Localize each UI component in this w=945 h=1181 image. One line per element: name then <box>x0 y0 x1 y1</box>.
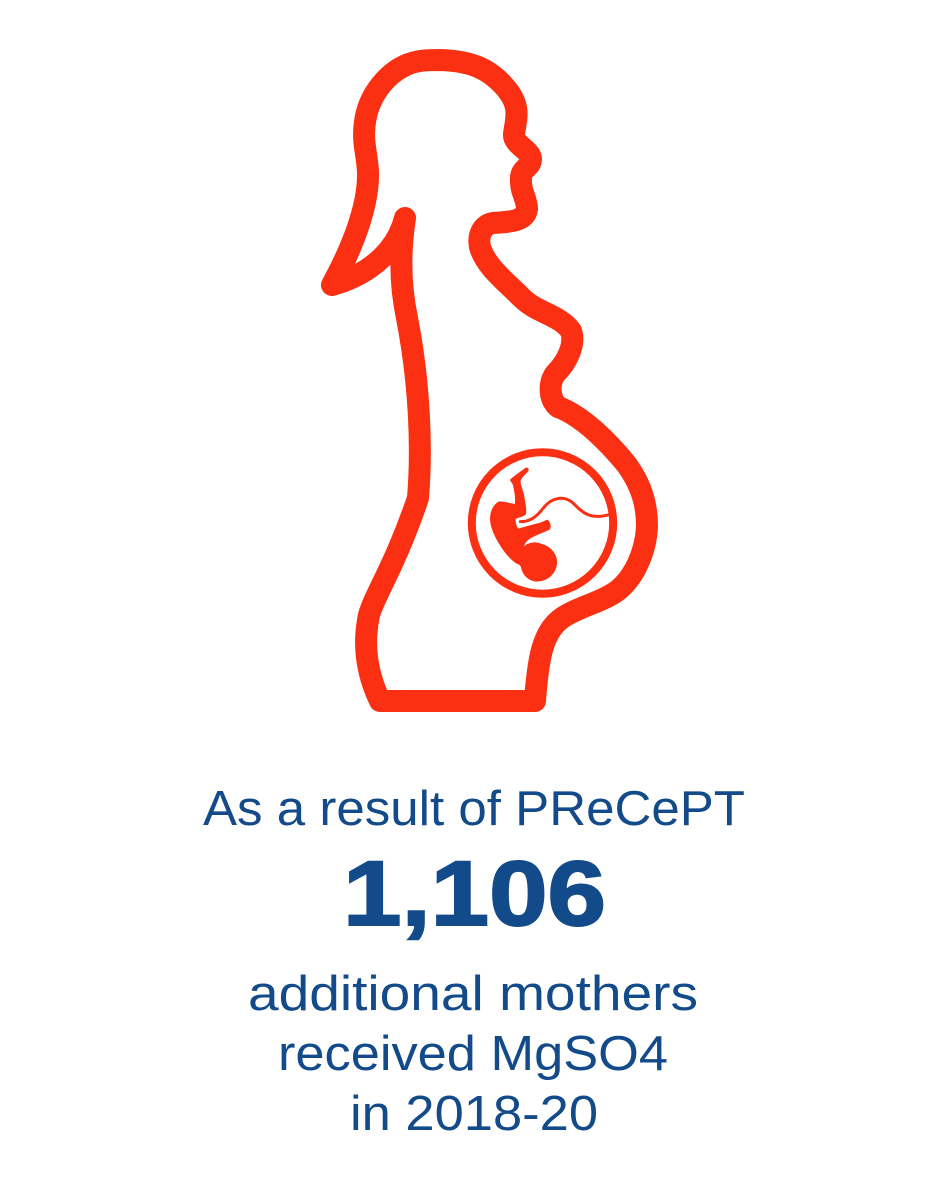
fetus <box>491 468 556 581</box>
text: description: in 2018-20 <box>350 1087 598 1141</box>
text: description: additional mothers <box>248 967 698 1021</box>
text: description <box>248 967 698 1141</box>
icon: fetus in womb <box>472 452 613 594</box>
womb circle <box>472 452 613 594</box>
text: description: received MgSO4 <box>278 1027 668 1081</box>
text: big number: 1,106 <box>343 843 606 945</box>
icon: pregnant woman silhouette outline <box>332 60 647 701</box>
text: intro line: As a result of PReCePT <box>203 782 745 836</box>
umbilical cord <box>520 498 609 522</box>
